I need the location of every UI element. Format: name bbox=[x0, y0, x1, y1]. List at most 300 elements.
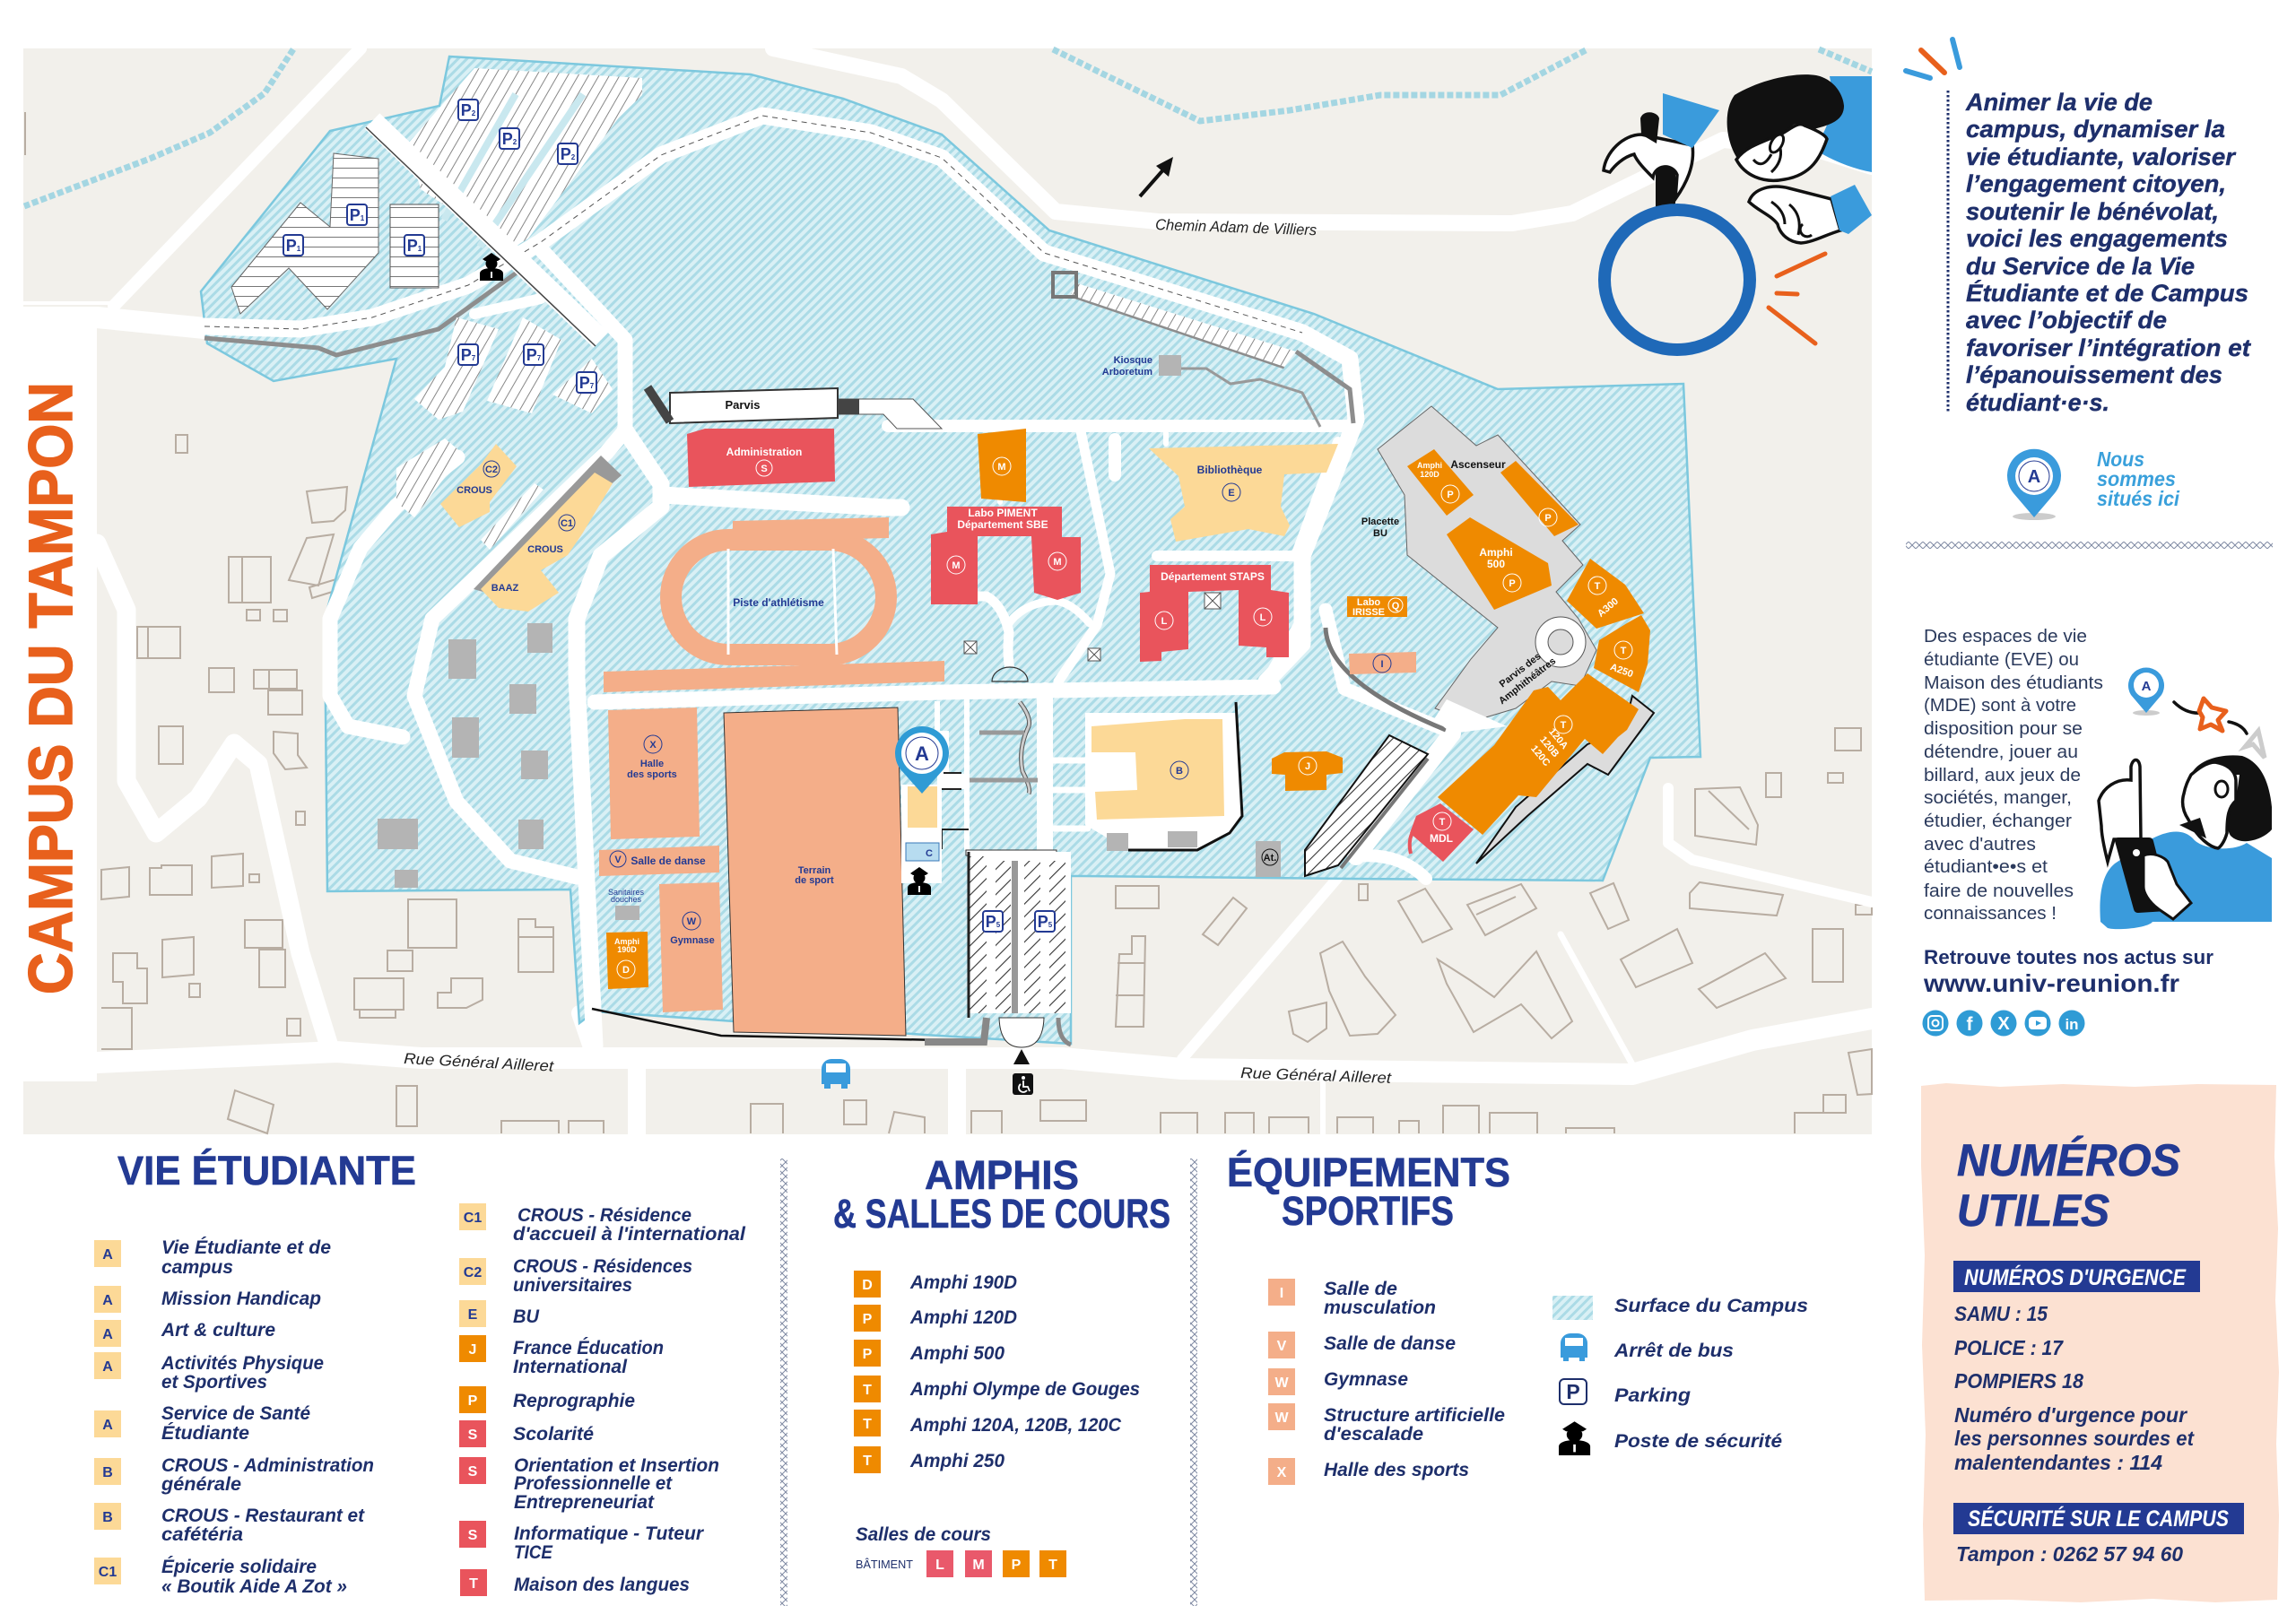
Sanitaires douches bbox=[608, 888, 645, 920]
parking near CROUS bbox=[396, 438, 544, 550]
icon: facebook bbox=[1957, 1010, 1982, 1037]
item: Salle de danse bbox=[1324, 1333, 1456, 1354]
badge L: L bbox=[935, 1558, 944, 1573]
item: Informatique - Tuteur bbox=[514, 1523, 705, 1544]
item bbox=[459, 1386, 635, 1413]
amphi 120A 120B 120C: 120A bbox=[1546, 726, 1570, 751]
item: Orientation et Insertion bbox=[514, 1455, 719, 1476]
face bbox=[1736, 125, 1827, 180]
building: M orange: M bbox=[997, 462, 1006, 473]
Parvis des Amphithéâtres: Amphithéâtres bbox=[1497, 655, 1558, 707]
item: Scolarité bbox=[513, 1424, 594, 1445]
Placette BU label: Placette bbox=[1361, 516, 1399, 527]
item: X bbox=[1277, 1465, 1287, 1480]
item bbox=[854, 1410, 1122, 1436]
intro text block: campus, dynamiser la bbox=[1966, 116, 2225, 143]
emergency numbers: POLICE : 17 bbox=[1954, 1336, 2064, 1359]
building: Administration: Administration bbox=[726, 446, 802, 458]
badge P7 bbox=[458, 344, 478, 365]
item: Reprographie bbox=[513, 1391, 635, 1411]
building: Labo PIMENT: Département SBE bbox=[957, 518, 1048, 531]
item: BU bbox=[513, 1306, 540, 1327]
item: Art & culture bbox=[161, 1320, 275, 1341]
building: Salle de danse: V bbox=[614, 855, 622, 865]
amphi 120A 120B 120C bbox=[1438, 673, 1639, 835]
Parvis des Amphithéâtres bbox=[1434, 651, 1558, 733]
badge P2: P2 bbox=[502, 130, 517, 148]
amphi 120A 120B 120C: 120B bbox=[1537, 734, 1561, 759]
item bbox=[854, 1446, 1004, 1473]
building: Bibliothèque bbox=[1149, 444, 1338, 542]
item: Salle de bbox=[1324, 1279, 1397, 1299]
item: A bbox=[102, 1327, 113, 1342]
phone camera bbox=[2133, 849, 2140, 856]
body blue bbox=[1813, 76, 1872, 172]
item bbox=[459, 1521, 705, 1563]
road label: Rue Général Ailleret east: Rue Général Ailleret bbox=[1240, 1064, 1393, 1087]
EVE text block: faire de nouvelles bbox=[1924, 881, 2074, 901]
building: Halle des sports: Halle bbox=[640, 759, 664, 769]
half circle fountain bbox=[992, 667, 1028, 681]
intro text block: avec l’objectif de bbox=[1966, 307, 2167, 334]
legend: salles de cours bbox=[856, 1524, 1066, 1577]
pin legend: nous sommes situés ici: sommes bbox=[2097, 467, 2176, 490]
stadium track: Piste d'athlétisme bbox=[733, 596, 824, 609]
item bbox=[460, 1569, 690, 1596]
building: Amphi 190D: D bbox=[622, 965, 630, 976]
road label: Rue Général Ailleret west: Rue Général Ailleret bbox=[404, 1050, 555, 1075]
grey arrow bbox=[2245, 731, 2265, 758]
item bbox=[459, 1335, 664, 1377]
divider right bbox=[1190, 1159, 1197, 1606]
building: Terrain de sport: de sport bbox=[795, 875, 834, 886]
building: Halle des sports: des sports bbox=[627, 769, 677, 780]
item bbox=[1268, 1368, 1408, 1395]
icon: security post top bbox=[480, 253, 503, 281]
intro text block bbox=[1965, 89, 2251, 416]
badge P2 bbox=[500, 128, 519, 149]
icon: wheelchair access bbox=[1013, 1073, 1033, 1095]
badge P5 bbox=[1035, 911, 1055, 932]
item: B bbox=[102, 1510, 113, 1525]
heading: vie étudiante: VIE ÉTUDIANTE bbox=[117, 1148, 416, 1193]
badge P7: P7 bbox=[461, 346, 476, 364]
item: A bbox=[102, 1359, 113, 1375]
building: Labo PIMENT: Labo PIMENT bbox=[968, 507, 1038, 519]
right hand fingers bbox=[1771, 202, 1812, 237]
item: Vie Étudiante et de bbox=[161, 1237, 331, 1258]
At. building: At. bbox=[1264, 853, 1276, 864]
icon: X: X bbox=[1997, 1014, 2010, 1034]
badge P7: P7 bbox=[579, 374, 595, 392]
emergency numbers bbox=[1954, 1302, 2195, 1474]
parking P7 bbox=[414, 317, 613, 420]
building: Labo IRISSE: Q bbox=[1392, 601, 1400, 612]
amphi 500: 500 bbox=[1487, 558, 1505, 570]
item: S bbox=[468, 1428, 478, 1443]
item: d'accueil à l'international bbox=[513, 1224, 746, 1245]
heading: numéros utiles: NUMÉROS bbox=[1957, 1135, 2180, 1185]
illustration: person pointing at pin bbox=[2099, 667, 2272, 929]
EVE text block: sociétés, manger, bbox=[1924, 788, 2072, 808]
parking P5 bbox=[925, 852, 1071, 1047]
CROUS C2: CROUS bbox=[457, 485, 492, 496]
badge T: T bbox=[1048, 1558, 1057, 1573]
badge P2: P2 bbox=[561, 145, 576, 163]
eye bbox=[2215, 781, 2228, 797]
road label: Chemin Adam de Villiers: Chemin Adam de Villiers bbox=[1155, 216, 1318, 239]
mouth bbox=[1753, 148, 1781, 172]
item bbox=[459, 1300, 540, 1327]
thumb bbox=[1640, 112, 1659, 143]
item bbox=[459, 1420, 594, 1447]
item: P bbox=[863, 1347, 873, 1362]
Parvis: Parvis bbox=[725, 398, 761, 412]
item: CROUS - Administration bbox=[161, 1455, 374, 1476]
item: CROUS - Résidences bbox=[513, 1256, 692, 1277]
area under main pin: C bbox=[926, 848, 933, 859]
Ascenseur label: Ascenseur bbox=[1450, 458, 1506, 471]
EVE text block bbox=[1924, 627, 2103, 924]
item: P bbox=[468, 1393, 478, 1409]
badge P5 bbox=[983, 911, 1003, 932]
heading: amphis et salles de cours: AMPHIS bbox=[925, 1152, 1079, 1198]
item: « Boutik Aide A Zot » bbox=[161, 1576, 347, 1597]
EVE text block: Des espaces de vie bbox=[1924, 627, 2087, 647]
item: Service de Santé bbox=[161, 1403, 310, 1424]
pin legend: nous sommes situés ici: situés ici bbox=[2097, 487, 2180, 510]
amphi 120A 120B 120C: T bbox=[1561, 720, 1567, 731]
amphi 120D: P bbox=[1447, 490, 1454, 500]
Sanitaires douches: douches bbox=[611, 895, 642, 904]
building: Département STAPS: Département STAPS bbox=[1161, 570, 1265, 583]
building: Salle de danse: Salle de danse bbox=[631, 855, 706, 867]
item bbox=[1268, 1458, 1469, 1485]
item: T bbox=[863, 1417, 872, 1432]
building: Amphi 190D: 190D bbox=[617, 945, 637, 954]
building: Administration: S bbox=[761, 464, 768, 474]
icon: bus stop bbox=[822, 1059, 850, 1089]
CROUS C1 bbox=[474, 456, 622, 612]
area under main pin bbox=[901, 785, 942, 883]
building: Bibliothèque: E bbox=[1228, 488, 1235, 499]
building: Halle des sports bbox=[608, 707, 700, 839]
CROUS C1: C1 bbox=[561, 518, 573, 529]
EVE text block: étudiant•e•s et bbox=[1924, 857, 2048, 877]
pin legend: nous sommes situés ici bbox=[2007, 447, 2180, 520]
pin legend: nous sommes situés ici: A bbox=[2028, 467, 2040, 487]
item: Professionnelle et bbox=[514, 1473, 673, 1494]
item bbox=[94, 1455, 374, 1495]
icon: X bbox=[1991, 1010, 2016, 1037]
building: Halle des sports: X bbox=[649, 740, 657, 751]
building: Gymnase: W bbox=[687, 916, 697, 927]
item: I bbox=[1280, 1286, 1283, 1301]
item bbox=[94, 1237, 331, 1278]
item bbox=[94, 1320, 275, 1347]
amphi A300 bbox=[1567, 559, 1644, 629]
item bbox=[1268, 1332, 1456, 1358]
EVE text block: étudier, échanger bbox=[1924, 812, 2072, 831]
building: Labo IRISSE: Labo bbox=[1357, 597, 1380, 608]
main location pin A: A bbox=[915, 742, 929, 765]
heading: numéros utiles bbox=[1957, 1135, 2180, 1236]
amphi A250 bbox=[1594, 615, 1650, 692]
poste de sécurité bbox=[1559, 1421, 1782, 1455]
Kiosque Arboretum: Kiosque bbox=[1114, 355, 1152, 366]
intro text block: du Service de la Vie bbox=[1966, 253, 2195, 280]
heading: équipements sportifs: ÉQUIPEMENTS bbox=[1227, 1150, 1510, 1195]
building: MDL: MDL bbox=[1430, 832, 1453, 845]
item: J bbox=[469, 1342, 476, 1358]
badge P1 bbox=[283, 235, 303, 256]
EVE text block: avec d'autres bbox=[1924, 835, 2036, 855]
heading: amphis et salles de cours bbox=[833, 1152, 1170, 1237]
heading: numéros utiles: UTILES bbox=[1957, 1185, 2109, 1236]
item: C1 bbox=[464, 1211, 482, 1226]
building: B CROUS restaurant: B bbox=[1176, 766, 1183, 777]
item: V bbox=[1277, 1339, 1287, 1354]
building: Bibliothèque: Bibliothèque bbox=[1197, 464, 1263, 476]
CROUS C1: CROUS bbox=[527, 544, 563, 555]
parking bbox=[1560, 1379, 1691, 1406]
item: Entrepreneuriat bbox=[514, 1492, 655, 1513]
neck shadow bbox=[2179, 818, 2206, 838]
CROUS C2 bbox=[440, 444, 517, 527]
amphi right P bbox=[1500, 461, 1578, 536]
building: Salle de danse bbox=[599, 846, 719, 876]
item: S bbox=[468, 1528, 478, 1543]
building: Amphi 190D bbox=[606, 932, 648, 989]
small pin: A bbox=[2142, 679, 2152, 694]
Placette BU label: BU bbox=[1373, 528, 1387, 539]
item bbox=[94, 1403, 310, 1444]
amphi 120D bbox=[1407, 449, 1474, 516]
building: Département STAPS: L bbox=[1161, 616, 1168, 627]
item: musculation bbox=[1324, 1298, 1436, 1318]
phone bbox=[2115, 838, 2170, 913]
item: W bbox=[1274, 1376, 1289, 1391]
item bbox=[94, 1286, 321, 1313]
amphi A300: T bbox=[1595, 581, 1601, 592]
left hand bbox=[1604, 135, 1693, 199]
face bbox=[2183, 762, 2236, 848]
item: cafétéria bbox=[161, 1524, 243, 1545]
amphi A250: T bbox=[1621, 646, 1627, 656]
dotted line beside intro bbox=[1946, 91, 1950, 412]
item: Activités Physique bbox=[161, 1353, 324, 1374]
heading: équipements sportifs bbox=[1227, 1150, 1510, 1234]
star bbox=[2199, 699, 2226, 731]
arrêt de bus bbox=[1561, 1333, 1734, 1361]
banner: sécurité sur le campus: SÉCURITÉ SUR LE CAMPUS bbox=[1968, 1506, 2229, 1532]
item bbox=[459, 1256, 692, 1296]
item: C2 bbox=[464, 1265, 482, 1280]
item: Mission Handicap bbox=[161, 1289, 321, 1309]
grey walls bbox=[204, 273, 1446, 730]
building: I musculation bbox=[1349, 652, 1416, 674]
central court lanes and paths bbox=[935, 641, 1100, 855]
amphi 120D: Amphi bbox=[1417, 461, 1442, 470]
amphi 500: P bbox=[1509, 578, 1516, 589]
badge P2 bbox=[558, 143, 578, 164]
item bbox=[854, 1376, 1140, 1402]
campus internal roads bbox=[204, 116, 1452, 1046]
amphitheatre complex bbox=[1361, 406, 1654, 864]
body bbox=[2100, 832, 2272, 929]
intro text block: étudiant·e·s. bbox=[1966, 389, 2109, 416]
heading: amphis et salles de cours: & SALLES DE COURS bbox=[833, 1191, 1170, 1237]
amphi 120A 120B 120C: 120C bbox=[1528, 743, 1552, 768]
outer roads bbox=[23, 48, 1872, 1134]
item: d'escalade bbox=[1324, 1424, 1423, 1445]
intro text block: soutenir le bénévolat, bbox=[1966, 198, 2219, 225]
building: Labo IRISSE bbox=[1347, 596, 1407, 618]
icon: linkedin: in bbox=[2065, 1016, 2079, 1033]
item: International bbox=[513, 1357, 628, 1377]
item: Épicerie solidaire bbox=[161, 1557, 317, 1577]
amphi 120D: 120D bbox=[1420, 470, 1439, 479]
building: Labo PIMENT: M bbox=[952, 560, 961, 571]
white strip behind title bbox=[0, 307, 97, 1081]
badge P1: P1 bbox=[286, 237, 301, 255]
follow us line: Retrouve toutes nos actus sur bbox=[1924, 946, 2213, 968]
badge L bbox=[926, 1550, 953, 1577]
legend column: vie étudiante 1 bbox=[94, 1237, 374, 1597]
item bbox=[854, 1340, 1004, 1367]
building: Administration bbox=[687, 429, 835, 487]
emergency numbers: Numéro d'urgence pour bbox=[1954, 1403, 2187, 1427]
building: Terrain de sport bbox=[724, 707, 906, 1036]
item bbox=[459, 1203, 746, 1245]
parking: P bbox=[1566, 1380, 1580, 1403]
legend: salles de cours: Salles de cours bbox=[856, 1524, 991, 1545]
Kiosque Arboretum bbox=[1102, 355, 1320, 427]
intro text block: Animer la vie de bbox=[1965, 89, 2152, 116]
At. building bbox=[1256, 841, 1281, 877]
hair bbox=[2191, 755, 2272, 841]
intro text block: l’engagement citoyen, bbox=[1966, 170, 2226, 197]
website url: www.univ-reunion.fr bbox=[1923, 969, 2179, 997]
item bbox=[854, 1271, 1017, 1298]
icon: youtube bbox=[2025, 1010, 2050, 1037]
item: Amphi 190D bbox=[909, 1272, 1017, 1293]
badge P: P bbox=[1012, 1558, 1022, 1573]
badge P7: P7 bbox=[526, 346, 542, 364]
item: TICE bbox=[514, 1542, 553, 1563]
icon: instagram bbox=[1923, 1010, 1948, 1037]
emergency numbers: SAMU : 15 bbox=[1954, 1302, 2048, 1325]
Parvis bbox=[648, 387, 942, 429]
surface du campus bbox=[1552, 1296, 1808, 1320]
item: T bbox=[469, 1576, 478, 1592]
intro text block: l’épanouissement des bbox=[1966, 361, 2222, 388]
badge T bbox=[1039, 1550, 1066, 1577]
amphi 500: Amphi bbox=[1479, 546, 1513, 559]
pin legend: nous sommes situés ici: Nous bbox=[2097, 447, 2144, 471]
badge P2: P2 bbox=[461, 101, 476, 119]
amphi A250: A250 bbox=[1609, 662, 1634, 680]
campus security phone: Tampon : 0262 57 94 60 bbox=[1956, 1542, 2183, 1566]
item: et Sportives bbox=[161, 1372, 267, 1393]
legend: salles de cours: BÂTIMENT bbox=[856, 1558, 913, 1571]
badge P1: P1 bbox=[407, 237, 422, 255]
EVE text block: billard, aux jeux de bbox=[1924, 766, 2081, 785]
amphi 500 bbox=[1447, 517, 1552, 610]
small pin bbox=[2128, 667, 2164, 716]
item: Maison des langues bbox=[514, 1575, 690, 1595]
Kiosque Arboretum: Arboretum bbox=[1102, 367, 1152, 378]
Placette BU label bbox=[1361, 516, 1399, 539]
legend: amphis bbox=[854, 1271, 1140, 1473]
Sanitaires douches: Sanitaires bbox=[608, 888, 645, 897]
building: Département STAPS: L bbox=[1260, 612, 1266, 623]
item: CROUS - Résidence bbox=[517, 1205, 691, 1226]
item: France Éducation bbox=[513, 1338, 664, 1358]
item: Amphi 250 bbox=[909, 1451, 1004, 1471]
building: I musculation: I bbox=[1380, 659, 1384, 670]
item: A bbox=[102, 1247, 113, 1263]
intro text block: voici les engagements bbox=[1966, 225, 2228, 252]
icon: facebook: f bbox=[1966, 1014, 1973, 1035]
badge P7 bbox=[524, 344, 544, 365]
left cuff bbox=[1663, 93, 1719, 148]
right cuff bbox=[1831, 185, 1872, 234]
badge P5: P5 bbox=[986, 913, 1001, 931]
building: J bbox=[1272, 751, 1343, 791]
emergency numbers: malentendantes : 114 bbox=[1954, 1451, 2162, 1474]
thin centre line of campus road bbox=[204, 116, 1302, 333]
campus surface hatched area bbox=[201, 56, 1700, 1044]
intro text block: favoriser l’intégration et bbox=[1966, 334, 2251, 361]
building: Terrain de sport: Terrain bbox=[798, 865, 831, 876]
item: Amphi 500 bbox=[909, 1343, 1004, 1364]
hair bbox=[1727, 74, 1844, 160]
social icons bbox=[1923, 1010, 2084, 1037]
magnifier handle bbox=[1656, 175, 1675, 206]
intro text block: vie étudiante, valoriser bbox=[1966, 143, 2237, 170]
building: Labo PIMENT bbox=[931, 507, 1081, 604]
item: S bbox=[468, 1464, 478, 1480]
poste de sécurité: Poste de sécurité bbox=[1614, 1431, 1782, 1452]
item bbox=[94, 1352, 324, 1393]
EVE text block: (MDE) sont à votre bbox=[1924, 696, 2076, 716]
item: A bbox=[102, 1418, 113, 1433]
item: générale bbox=[161, 1474, 241, 1495]
item: C1 bbox=[99, 1565, 117, 1580]
emergency numbers: les personnes sourdes et bbox=[1954, 1427, 2195, 1450]
blue dashed footpaths bbox=[24, 49, 1872, 206]
item: Amphi 120D bbox=[909, 1307, 1017, 1328]
Parvis des Amphithéâtres: Parvis des bbox=[1498, 651, 1544, 690]
surrounding building outlines bbox=[25, 112, 1872, 1133]
building: Amphi 190D: Amphi bbox=[614, 937, 639, 946]
item: Gymnase bbox=[1324, 1369, 1408, 1390]
item: CROUS - Restaurant et bbox=[161, 1506, 365, 1526]
icon: entrance triangle bbox=[1013, 1049, 1030, 1064]
legend column: vie étudiante 2 bbox=[459, 1203, 746, 1596]
main location pin A bbox=[895, 726, 949, 794]
heading: équipements sportifs: SPORTIFS bbox=[1282, 1188, 1454, 1234]
phone hand bbox=[2144, 855, 2191, 919]
icon: security post bottom bbox=[908, 867, 931, 895]
surface du campus: Surface du Campus bbox=[1614, 1296, 1808, 1316]
magnifier ring bbox=[1605, 210, 1750, 350]
item: Amphi Olympe de Gouges bbox=[909, 1379, 1140, 1400]
item: A bbox=[102, 1293, 113, 1308]
badge P bbox=[1003, 1550, 1030, 1577]
item: Halle des sports bbox=[1324, 1460, 1469, 1480]
